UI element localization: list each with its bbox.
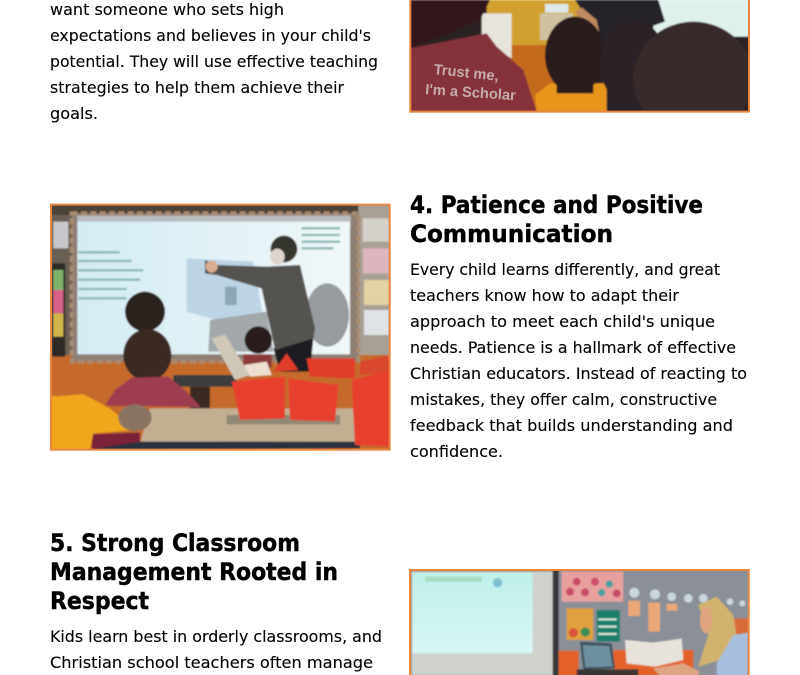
photo: teacher holding open book beside projection screen [409, 569, 749, 675]
heading: 4. Patience and Positive Communication: Communication [410, 220, 613, 248]
photo: students in red and orange shirts raising hands [409, 0, 750, 113]
heading: 4. Patience and Positive Communication: 4. Patience and Positive [410, 191, 703, 219]
text block: section 3 paragraph ending: strategies to help them achieve their [50, 78, 344, 97]
heading: 5. Strong Classroom Management Rooted in Respect: Respect [50, 587, 149, 615]
heading: 5. Strong Classroom Management Rooted in Respect: 5. Strong Classroom [50, 529, 300, 557]
heading: 5. Strong Classroom Management Rooted in Respect [50, 529, 338, 615]
text block: section 4 paragraph: feedback that builds understanding and [410, 416, 733, 435]
text block: section 4 paragraph: confidence. [410, 442, 503, 461]
text block: section 5 paragraph start: Kids learn best in orderly classrooms, and [50, 627, 382, 646]
text block: section 3 paragraph ending: potential. They will use effective teaching [50, 52, 378, 71]
text block: section 4 paragraph: Christian educators. Instead of reacting to [410, 364, 747, 383]
text block: section 4 paragraph: needs. Patience is a hallmark of effective [410, 338, 736, 357]
text block: section 3 paragraph ending: expectations and believes in your child's [50, 26, 371, 45]
text block: section 4 paragraph: teachers know how to adapt their [410, 286, 679, 305]
text block: section 4 paragraph: Every child learns differently, and great [410, 260, 720, 279]
photo: students in red and orange shirts raising hands: I'm a Scholar [425, 82, 517, 104]
heading: 4. Patience and Positive Communication [410, 191, 703, 248]
text block: section 4 paragraph [410, 260, 747, 461]
text block: section 3 paragraph ending: want someone who sets high [50, 0, 284, 19]
text block: section 3 paragraph ending [50, 0, 378, 123]
text block: section 3 paragraph ending: goals. [50, 104, 98, 123]
heading: 5. Strong Classroom Management Rooted in Respect: Management Rooted in [50, 558, 338, 586]
text block: section 4 paragraph: approach to meet each child's unique [410, 312, 715, 331]
text block: section 4 paragraph: mistakes, they offer calm, constructive [410, 390, 717, 409]
photo: teacher pointing at projected screen in classroom [51, 204, 390, 450]
photo: students in red and orange shirts raising hands: Trust me, [433, 62, 499, 85]
text block: section 5 paragraph start [50, 627, 382, 672]
text block: section 5 paragraph start: Christian school teachers often manage [50, 653, 373, 672]
